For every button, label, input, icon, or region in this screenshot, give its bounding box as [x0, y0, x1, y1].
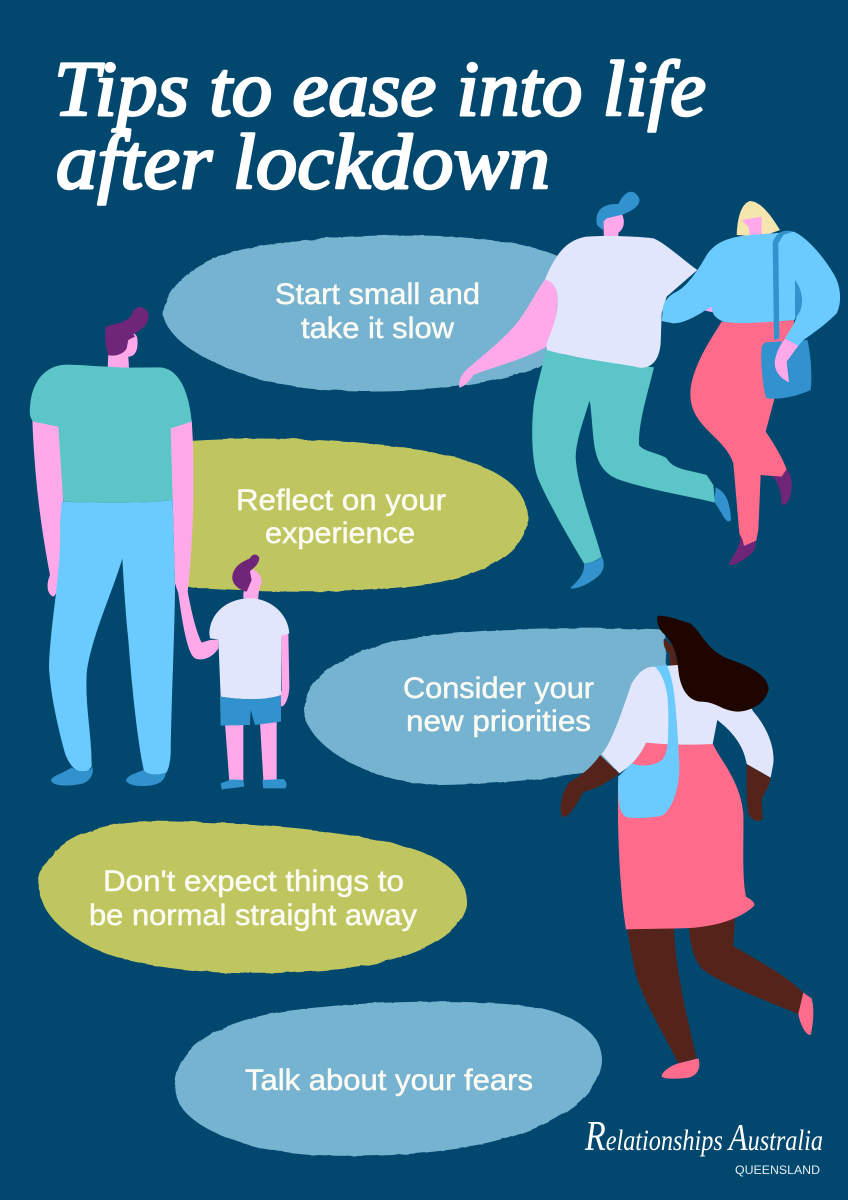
title: after lockdown — [56, 118, 550, 205]
man's shoes — [570, 487, 731, 589]
man's shirt — [545, 236, 697, 368]
title — [54, 45, 706, 205]
arms and neck — [561, 638, 771, 821]
child — [209, 555, 289, 789]
logo: Relationships Australia Queensland — [584, 1114, 823, 1177]
panel: normal — [39, 821, 467, 973]
panel: normal: Don't expect things to — [103, 865, 404, 898]
figure: father and child — [30, 307, 289, 789]
man's trousers — [532, 350, 715, 563]
shoes — [662, 993, 813, 1079]
panel: reflect: experience — [265, 517, 415, 550]
sleeve shadow — [795, 280, 802, 318]
man's head — [596, 192, 639, 246]
father's shirt — [30, 365, 192, 503]
figure: woman with shoulder bag — [561, 616, 813, 1079]
panel: fears — [175, 1002, 602, 1156]
father's head — [105, 307, 149, 368]
blouse — [602, 665, 774, 778]
hair — [657, 616, 769, 712]
man's hand on woman — [705, 306, 713, 312]
panel: priorities — [304, 628, 670, 785]
father's shoes — [51, 767, 166, 786]
bag strap — [773, 231, 793, 340]
panel: start small — [163, 235, 570, 391]
panel: start small: Start small and — [275, 278, 480, 311]
woman's shoes — [729, 469, 792, 565]
logo: Relationships Australia Queensland: QUEENSLAND — [735, 1163, 820, 1177]
panel: priorities: Consider your — [403, 672, 594, 705]
legs — [627, 917, 803, 1063]
panel: start small: take it slow — [301, 312, 454, 345]
skirt — [618, 743, 754, 929]
woman's trousers — [690, 320, 794, 546]
father's arms — [32, 420, 218, 659]
panel: reflect: Reflect on your — [236, 484, 446, 517]
handbag — [761, 340, 811, 399]
woman's hand — [775, 338, 798, 382]
woman's sweater — [662, 232, 840, 346]
man's arm — [459, 279, 558, 388]
panel: normal: be normal straight away — [89, 899, 417, 932]
panel: fears: Talk about your fears — [245, 1064, 533, 1097]
logo: Relationships Australia Queensland: Relationships Australia — [584, 1114, 823, 1160]
figure: walking couple — [459, 192, 840, 589]
father's trousers — [49, 500, 175, 775]
panel: reflect — [180, 438, 528, 592]
title: Tips to ease into life — [54, 45, 706, 132]
shoulder bag — [618, 665, 679, 818]
woman's hair and face — [737, 201, 780, 237]
panel: priorities: new priorities — [406, 705, 591, 738]
